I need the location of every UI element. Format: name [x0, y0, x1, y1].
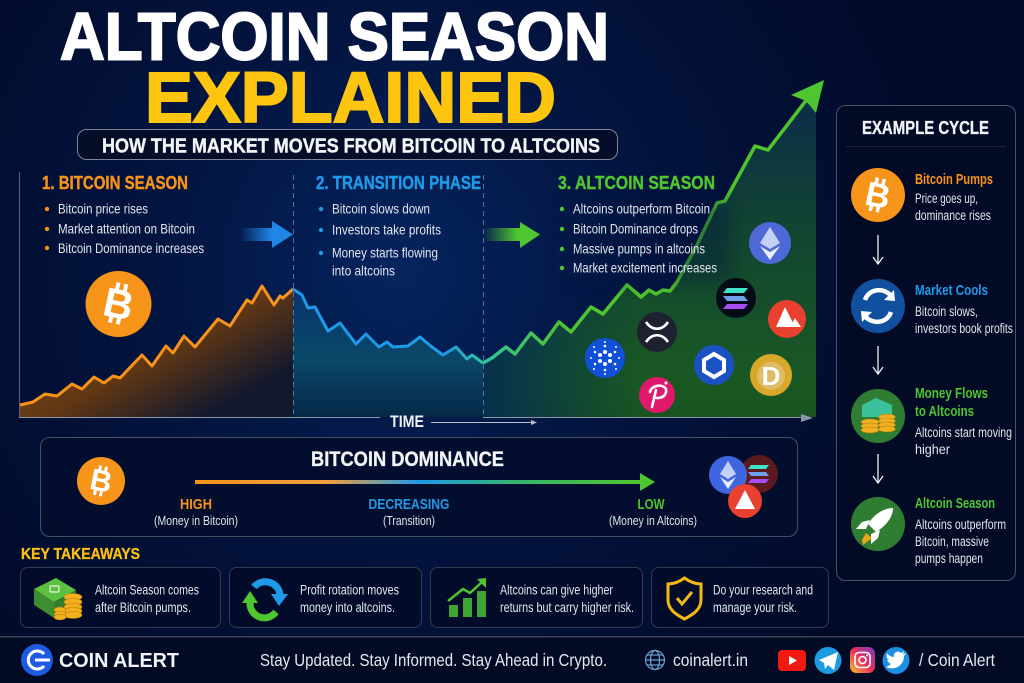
text [300, 582, 399, 615]
step: money flows [851, 385, 1012, 457]
text: Altcoins can give higher [500, 582, 613, 598]
title: ALTCOIN SEASON [60, 0, 609, 74]
phase dividers [294, 175, 484, 417]
step: bitcoin pumps: B [862, 175, 894, 217]
arrow: step 1 to 2 [873, 235, 883, 264]
logo [21, 644, 179, 676]
text: money into altcoins. [300, 600, 395, 615]
bullets: Market attention on Bitcoin [58, 220, 195, 236]
bullets: Market excitement increases [573, 260, 717, 276]
arrowhead: green trend [791, 80, 824, 113]
bullets [560, 200, 717, 276]
text [500, 582, 634, 615]
logo: COIN ALERT [59, 650, 179, 672]
text: Do your research and [713, 582, 813, 598]
step: money flows: Money Flows [915, 385, 988, 402]
heading: EXAMPLE CYCLE [862, 118, 989, 138]
panel: example cycle [836, 106, 1016, 580]
step: market cools: Bitcoin slows, [915, 304, 978, 319]
step: bitcoin pumps: Bitcoin Pumps [915, 171, 993, 188]
website: coinalert.in [673, 650, 748, 670]
label: high [154, 496, 238, 528]
icon: ethereum [749, 222, 791, 264]
label: high: HIGH [180, 496, 212, 513]
bullets: Bitcoin slows down [332, 200, 430, 216]
icon: twitter [882, 647, 910, 674]
title [60, 0, 609, 138]
tagline: Stay Updated. Stay Informed. Stay Ahead in Crypto. [260, 650, 607, 670]
label: decreasing: (Transition) [383, 514, 435, 528]
panel: altcoin season [558, 172, 717, 276]
label: low: (Money in Altcoins) [609, 514, 697, 528]
bullets: Bitcoin Dominance increases [58, 240, 204, 256]
icon: polkadot [639, 377, 675, 413]
step: bitcoin pumps: Price goes up, [915, 191, 978, 206]
icon: bitcoin [77, 457, 125, 505]
bullets [319, 200, 441, 278]
social handle: / Coin Alert [919, 650, 995, 670]
icon: instagram [850, 647, 875, 673]
text: returns but carry higher risk. [500, 600, 634, 615]
icon: growth chart [448, 578, 486, 617]
icon: cardano [585, 338, 625, 378]
panel: bitcoin dominance [40, 438, 798, 536]
step: altcoin season [851, 495, 1006, 566]
website [646, 650, 748, 670]
label: low: LOW [638, 496, 665, 513]
heading: key takeaways: KEY TAKEAWAYS [21, 546, 140, 563]
card: takeaway 2 [230, 568, 422, 628]
subtitle pill: HOW THE MARKET MOVES FROM BITCOIN TO ALTCOINS [102, 134, 600, 158]
arrow: step 2 to 3 [873, 346, 883, 374]
step: altcoin season: Altcoin Season [915, 495, 995, 512]
icon: youtube [778, 650, 806, 671]
icon: altcoin cluster [709, 455, 778, 518]
bullets [45, 200, 204, 256]
bullets: Massive pumps in altcoins [573, 240, 705, 256]
step: market cools [851, 279, 1013, 336]
card: takeaway 4 [652, 568, 828, 628]
icon: shield [668, 578, 701, 619]
subtitle pill [78, 130, 618, 160]
label: high: (Money in Bitcoin) [154, 514, 238, 528]
area: altcoin season [483, 92, 816, 417]
line: transition [293, 289, 483, 363]
bullets: Money starts flowing [332, 244, 438, 260]
icon: xrp [637, 312, 677, 352]
icon: bitcoin coin: B [99, 278, 138, 330]
heading: 2. TRANSITION PHASE [316, 172, 481, 193]
label: low [609, 496, 697, 528]
area: bitcoin season [20, 286, 293, 417]
axes [19, 172, 802, 418]
icon: dogecoin: D [762, 361, 780, 391]
text: Profit rotation moves [300, 582, 399, 598]
bullets: Bitcoin price rises [58, 200, 148, 216]
footer [0, 636, 1024, 683]
heading: 1. BITCOIN SEASON [42, 172, 188, 193]
time label [390, 412, 537, 431]
icon: bitcoin: B [87, 463, 115, 500]
bullets: Investors take profits [332, 222, 441, 238]
icon: solana [716, 278, 756, 318]
label: decreasing [368, 496, 450, 528]
step: altcoin season: Bitcoin, massive [915, 534, 989, 549]
card: takeaway 3 [430, 568, 642, 628]
text [95, 582, 199, 615]
arrow: to altcoin season [483, 222, 540, 248]
text: after Bitcoin pumps. [95, 600, 191, 615]
card: takeaway 1 [20, 568, 220, 628]
panel: bitcoin season [42, 172, 204, 337]
line: bitcoin rises [20, 286, 293, 405]
bullets: Bitcoin Dominance drops [573, 220, 698, 236]
arrow: step 3 to 4 [873, 454, 883, 483]
step: bitcoin pumps: dominance rises [915, 208, 991, 223]
step: money flows: higher [915, 442, 950, 457]
step: money flows: to Altcoins [915, 403, 974, 420]
arrow: to transition [240, 221, 293, 248]
text: manage your risk. [713, 600, 797, 615]
text [713, 582, 813, 615]
icon: avalanche [768, 300, 806, 338]
label: decreasing: DECREASING [368, 496, 450, 513]
icon: chainlink [694, 345, 734, 385]
line: altcoin rise [483, 98, 808, 363]
icon: dogecoin [750, 354, 792, 396]
icon: bitcoin coin [86, 271, 152, 337]
area: transition phase [293, 289, 483, 417]
bullets: into altcoins [332, 262, 395, 278]
bullets: Altcoins outperform Bitcoin [573, 200, 710, 216]
gradient arrow [195, 473, 655, 491]
step: altcoin season: pumps happen [915, 551, 983, 566]
heading: 3. ALTCOIN SEASON [558, 172, 715, 193]
heading: BITCOIN DOMINANCE [311, 448, 504, 471]
icon: cash and coins [34, 578, 82, 620]
icon: telegram [814, 647, 842, 674]
icon: rotation arrows [242, 582, 288, 618]
text: Altcoin Season comes [95, 582, 199, 598]
step: market cools: Market Cools [915, 282, 988, 299]
title: EXPLAINED [145, 59, 556, 138]
time label: TIME [390, 412, 424, 431]
chart [19, 80, 824, 431]
axis arrowhead [801, 414, 813, 422]
panel: transition phase [316, 172, 481, 278]
step: bitcoin pumps [851, 168, 993, 223]
